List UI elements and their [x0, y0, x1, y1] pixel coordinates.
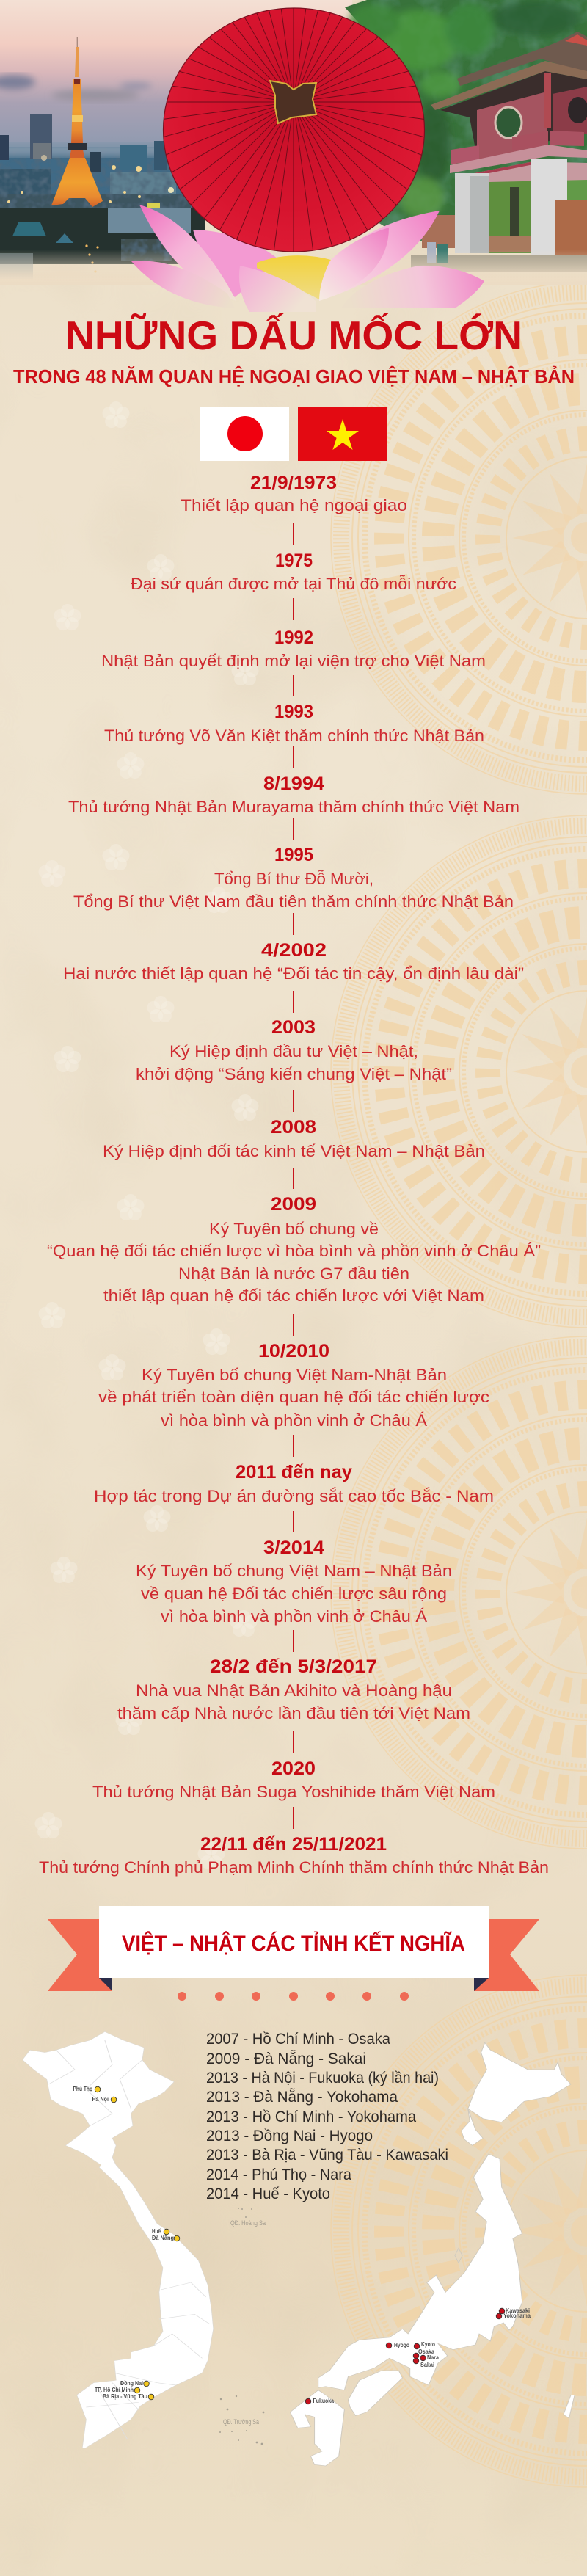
islands: Hoàng Sa [230, 2208, 266, 2227]
event 1975 [131, 550, 456, 593]
event 2009: thiết lập quan hệ đối tác chiến lược với Việt Nam [103, 1287, 484, 1305]
event 2020: 2020 [271, 1758, 316, 1779]
label: Yokohama: Yokohama [503, 2312, 531, 2319]
map: Japan [290, 2042, 575, 2466]
event 8/1994: Thủ tướng Nhật Bản Murayama thăm chính thức Việt Nam [68, 798, 519, 816]
event 1992: 1992 [274, 627, 313, 648]
event 2017: thăm cấp Nhà nước lần đầu tiên tới Việt Nam [117, 1704, 470, 1722]
event 1975: 1975 [275, 550, 313, 571]
label: Đà Nẵng: Đà Nẵng [152, 2233, 174, 2241]
banner: twin provinces heading [48, 1906, 539, 1991]
subtitle: TRONG 48 NĂM QUAN HỆ NGOẠI GIAO VIỆT NAM – NHẬT BẢN [13, 365, 575, 388]
label: Huế [152, 2227, 169, 2235]
event 2021 [39, 1834, 549, 1877]
title: NHỮNG DẤU MỐC LỚN [65, 313, 522, 358]
label: Sakai [413, 2358, 434, 2368]
islands: Hoàng Sa: QĐ. Hoàng Sa [230, 2219, 266, 2227]
event 2003: Ký Hiệp định đầu tư Việt – Nhật, [169, 1042, 418, 1060]
twin province list: 2014 - Huế - Kyoto [206, 2186, 330, 2202]
flag: Vietnam [298, 407, 387, 461]
event 2009: 2009 [271, 1194, 316, 1215]
event 3/2014: 3/2014 [263, 1538, 324, 1558]
bronze drum patterns [331, 282, 587, 2487]
label: Bà Rịa - Vũng Tàu: Bà Rịa - Vũng Tàu [103, 2393, 147, 2400]
event 1995: 1995 [274, 845, 313, 865]
label: Nara [420, 2354, 439, 2361]
twin province list: 2009 - Đà Nẵng - Sakai [206, 2051, 366, 2067]
label: Kawasaki: Kawasaki [506, 2307, 530, 2314]
event 1993 [104, 702, 484, 745]
event 2017 [117, 1656, 470, 1722]
flag: Japan [200, 407, 289, 461]
event 2008: 2008 [271, 1117, 316, 1138]
event 2009: “Quan hệ đối tác chiến lược vì hòa bình và phồn vinh ở Châu Á” [47, 1242, 541, 1260]
event 3/2014 [136, 1538, 452, 1626]
event 10/2010: Ký Tuyên bố chung Việt Nam-Nhật Bản [142, 1366, 447, 1384]
event 1993: 1993 [274, 702, 313, 722]
event 2017: 28/2 đến 5/3/2017 [210, 1656, 377, 1677]
Tokyo skyline [0, 0, 352, 279]
event 2021: 22/11 đến 25/11/2021 [200, 1834, 387, 1855]
event 2021: Thủ tướng Chính phủ Phạm Minh Chính thăm chính thức Nhật Bản [39, 1858, 549, 1877]
label: Fukuoka: Fukuoka [313, 2397, 334, 2404]
temple of literature [345, 0, 587, 272]
event 4/2002: 4/2002 [261, 940, 327, 961]
event 1973: Thiết lập quan hệ ngoại giao [181, 496, 407, 514]
umbrella [163, 7, 426, 252]
event 2011: Hợp tác trong Dự án đường sắt cao tốc Bắc - Nam [94, 1487, 494, 1505]
event 1973 [181, 473, 407, 514]
label: Huế: Huế [152, 2227, 161, 2235]
banner dots [178, 1992, 409, 2001]
event 2003: 2003 [271, 1017, 316, 1038]
label: Hà Nội: Hà Nội [92, 2095, 109, 2103]
islands: Trường Sa [219, 2395, 264, 2445]
event 10/2010: 10/2010 [258, 1341, 329, 1361]
event 1995: Tổng Bí thư Đỗ Mười, [214, 870, 373, 888]
label: Đồng Nai: Đồng Nai [120, 2379, 143, 2387]
banner: twin provinces heading: VIỆT – NHẬT CÁC TỈNH KẾT NGHĨA [122, 1931, 465, 1956]
fade into paper [0, 250, 587, 285]
event 4/2002: Hai nước thiết lập quan hệ “Đối tác tin cậy, ổn định lâu dài” [63, 964, 524, 983]
event 1992 [101, 627, 486, 670]
label: Sakai: Sakai [420, 2361, 434, 2368]
event 1992: Nhật Bản quyết định mở lại viện trợ cho Việt Nam [101, 652, 486, 670]
event 2017: Nhà vua Nhật Bản Akihito và Hoàng hậu [136, 1681, 452, 1700]
event 10/2010: vì hòa bình và phồn vinh ở Châu Á [161, 1411, 427, 1430]
event 1973: 21/9/1973 [250, 473, 337, 493]
event 10/2010: về phát triển toàn diện quan hệ đối tác chiến lược [98, 1388, 489, 1406]
label: Phú Thọ: Phú Thọ [73, 2085, 92, 2092]
twin province list: 2007 - Hồ Chí Minh - Osaka [206, 2031, 390, 2048]
event 2009: Nhật Bản là nước G7 đầu tiên [178, 1265, 409, 1283]
event 1995: Tổng Bí thư Việt Nam đầu tiên thăm chính thức Nhật Bản [73, 892, 514, 911]
label: Kyoto: Kyoto [421, 2340, 435, 2348]
event 2009: Ký Tuyên bố chung về [209, 1220, 379, 1238]
event 2003: khởi động “Sáng kiến chung Việt – Nhật” [136, 1065, 452, 1083]
event 2008 [103, 1117, 485, 1160]
lotus front petals [131, 205, 484, 312]
event 8/1994: 8/1994 [263, 774, 324, 794]
islands: Trường Sa: QĐ. Trường Sa [223, 2418, 259, 2426]
label: Hyogo [386, 2341, 409, 2348]
people seated [427, 242, 448, 263]
timeline [39, 473, 549, 1877]
event 2020: Thủ tướng Nhật Bản Suga Yoshihide thăm Việt Nam [92, 1783, 495, 1801]
label: TP. Hồ Chí Minh: TP. Hồ Chí Minh [95, 2386, 134, 2393]
map: Vietnam [23, 2031, 266, 2449]
event 2011 [94, 1462, 494, 1505]
event 3/2014: về quan hệ Đối tác chiến lược sâu rộng [141, 1584, 447, 1603]
twin province list: 2013 - Bà Rịa - Vũng Tàu - Kawasaki [206, 2147, 448, 2164]
event 4/2002 [63, 940, 524, 983]
umbrella hub [270, 81, 316, 123]
icon: Tokyo tower [51, 37, 103, 207]
event 1993: Thủ tướng Võ Văn Kiệt thăm chính thức Nhật Bản [104, 727, 484, 745]
event 8/1994 [68, 774, 519, 816]
label: Kyoto [414, 2340, 435, 2349]
event 2008: Ký Hiệp định đối tác kinh tế Việt Nam – Nhật Bản [103, 1142, 485, 1160]
label: Hyogo: Hyogo [394, 2341, 409, 2348]
event 10/2010 [98, 1341, 489, 1430]
event 2011: 2011 đến nay [236, 1462, 352, 1482]
event 3/2014: vì hòa bình và phồn vinh ở Châu Á [161, 1607, 427, 1626]
twin province list [206, 2031, 448, 2202]
label: Nara: Nara [427, 2354, 439, 2361]
twin province list: 2013 - Đồng Nai - Hyogo [206, 2128, 373, 2144]
label: Fukuoka [305, 2397, 334, 2404]
event 2003 [136, 1017, 452, 1083]
label: Osaka: Osaka [418, 2348, 434, 2355]
event 3/2014: Ký Tuyên bố chung Việt Nam – Nhật Bản [136, 1562, 452, 1580]
lotus back petals [193, 230, 334, 299]
twin province list: 2013 - Hà Nội - Fukuoka (ký lần hai) [206, 2070, 439, 2086]
event 1995 [73, 845, 514, 911]
label: Kawasaki [499, 2307, 530, 2314]
event 2009 [47, 1194, 541, 1305]
event 2020 [92, 1758, 495, 1801]
plum blossoms [35, 401, 258, 1869]
twin province list: 2014 - Phú Thọ - Nara [206, 2166, 351, 2183]
twin province list: 2013 - Hồ Chí Minh - Yokohama [206, 2109, 416, 2125]
event 1975: Đại sứ quán được mở tại Thủ đô mỗi nước [131, 575, 456, 593]
label: Osaka [413, 2348, 434, 2359]
hero illustration [0, 0, 587, 380]
twin province list: 2013 - Đà Nẵng - Yokohama [206, 2089, 398, 2106]
